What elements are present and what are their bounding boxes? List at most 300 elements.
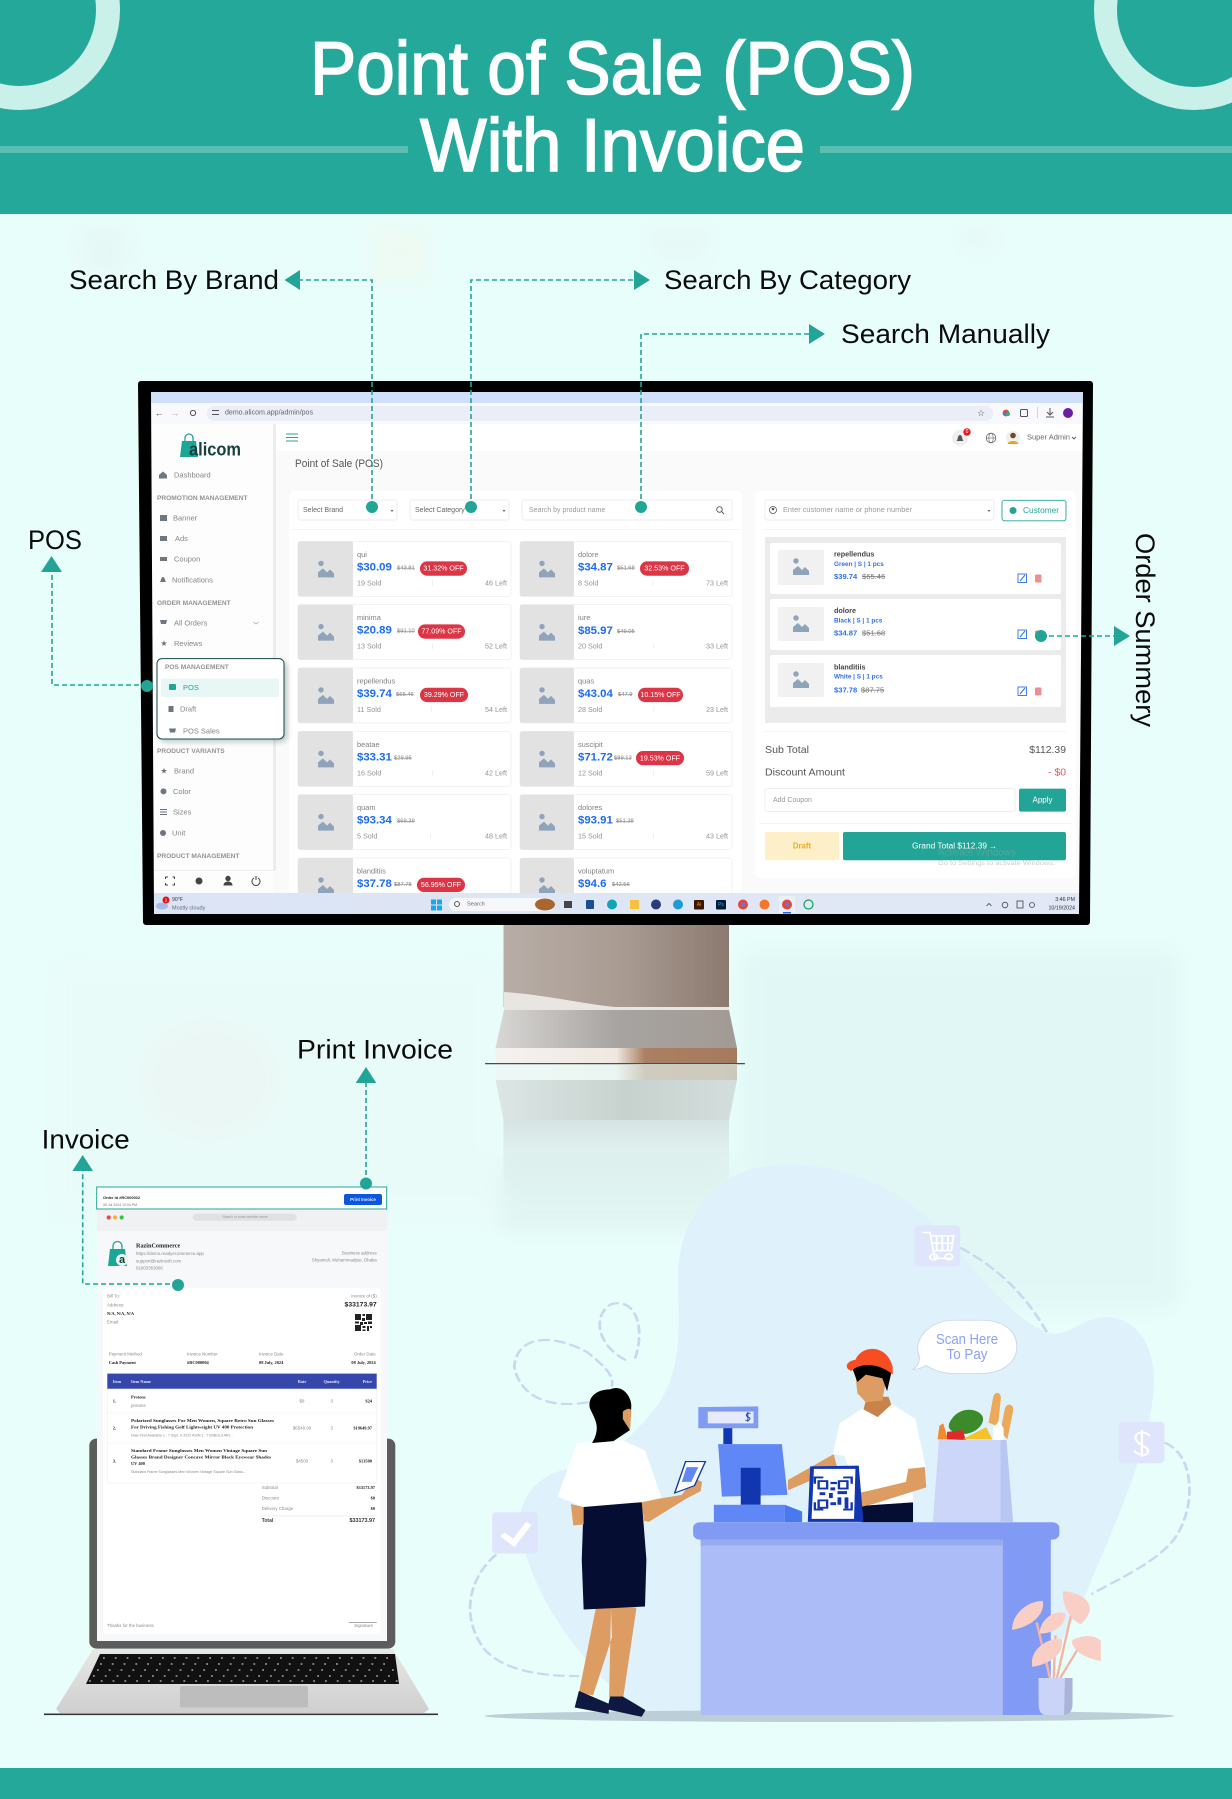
bill to: N/A, N/A, N/A [107, 1311, 135, 1316]
laptop lid [89, 1439, 395, 1649]
sidebar: PROMOTION MANAGEMENT [157, 495, 247, 502]
seller details: https://demo.readyecommerce.app [136, 1251, 204, 1256]
cashier pants [861, 1502, 913, 1522]
product card: minima: minima [357, 613, 382, 622]
sidebar footer icons [166, 876, 260, 885]
product card: suscipit: suscipit [578, 740, 603, 749]
cart item: repellendus: $39.74 [834, 572, 858, 581]
product card: quas: 10.15% OFF [640, 691, 681, 699]
menu: orders: All Orders [174, 618, 208, 628]
cart item: repellendus [770, 543, 1061, 594]
header band [0, 0, 1232, 214]
top bar: Super Admin [1027, 434, 1070, 442]
product card: qui: 46 Left [485, 578, 507, 588]
invoice logo [108, 1242, 128, 1266]
product card: beatae: $29.95 [394, 756, 412, 762]
taskbar app icons: Ps [718, 902, 724, 908]
product card: quas: $47.9 [618, 692, 633, 698]
print invoice bar: Print Invoice [350, 1197, 376, 1202]
woman arms [571, 1478, 702, 1526]
cart item: dolore [770, 599, 1061, 650]
table row 2: Date First Available 1 : 7 Sept. 9 2022 ASIN 1 : 7 B0BGL0JRN... [131, 1434, 233, 1438]
invoice meta: 08 July, 2024 [351, 1360, 376, 1365]
invoice meta: Cash Payment [109, 1360, 136, 1365]
table row 2: 3 [330, 1426, 333, 1430]
laptop base [56, 1649, 429, 1713]
product card: quam: $69.39 [397, 819, 415, 825]
product card: beatae: beatae [357, 740, 380, 749]
icon: cart tile [914, 1225, 960, 1267]
invoice table: Item [113, 1379, 122, 1384]
browser toolbar: demo.alicom.app/admin/pos [225, 410, 314, 416]
brand select: Select Brand [303, 507, 343, 514]
product card: quas: 28 Sold [578, 705, 602, 714]
invoice table: Item Name [131, 1379, 151, 1384]
bill to: Bill To: [107, 1294, 120, 1298]
cashier shirt [833, 1404, 926, 1506]
cart item: blanditiis: blanditiis [834, 662, 866, 672]
table row 3: Standard Frame Sunglasses Men Women Vintage Square Sun [131, 1448, 268, 1453]
product card: qui: qui [357, 550, 367, 559]
customer button: Customer [1023, 506, 1059, 515]
callout: Search Manually: Search Manually [841, 319, 1051, 349]
weather widget [156, 896, 206, 912]
product card: quam: 48 Left [485, 832, 507, 841]
cashier head [855, 1375, 887, 1402]
logo: alicom [189, 438, 241, 460]
apply button: Apply [1032, 796, 1053, 804]
invoice meta: #RC000004 [187, 1360, 210, 1365]
product card: suscipit: 59 Left [706, 768, 728, 778]
invoice card [103, 1288, 381, 1634]
menu: orders: ★ [160, 639, 168, 648]
menu: promotions: Coupon [174, 554, 200, 564]
invoice meta: Invoice Number [187, 1352, 218, 1356]
register [698, 1406, 802, 1522]
print invoice bar [97, 1187, 387, 1209]
cart item: blanditiis [770, 655, 1061, 707]
cart item: dolore: dolore [834, 606, 856, 615]
table row 2: Polarized Sunglasses For Men Women, Square Retro Sun Glasses [131, 1418, 274, 1423]
icon: dollar tile [1119, 1422, 1165, 1463]
invoice browser page [97, 1210, 387, 1641]
seller details: 01903353066 [136, 1266, 163, 1270]
screen [150, 392, 1086, 915]
totals: - $0 [1048, 768, 1066, 778]
cart item: repellendus: Green | S | 1 pcs [834, 561, 884, 568]
product card: repellendus: $39.74 [357, 688, 393, 700]
invoice totals: Total [262, 1518, 274, 1524]
product card: dolores: 43 Left [706, 832, 728, 841]
invoice meta: Order Date [354, 1352, 376, 1356]
product card: beatae: 16 Sold [357, 768, 381, 778]
apply button [1019, 789, 1066, 812]
product card: beatae: 42 Left [485, 768, 507, 778]
invoice totals: $33173.97 [356, 1485, 376, 1490]
table row 3: $4500 [296, 1458, 309, 1464]
callout: Print Invoice: Print Invoice [297, 1035, 453, 1065]
table row 1 [113, 1394, 373, 1408]
product card: blanditiis: 56.95% OFF [421, 881, 462, 889]
cashier arm behind [788, 1454, 838, 1490]
product card: quas: $43.04 [578, 688, 614, 700]
product card: dolores: $51.38 [616, 819, 634, 825]
windows taskbar [150, 893, 1085, 914]
POS management popover: POS [183, 683, 199, 692]
woman head [589, 1388, 631, 1443]
table row 2: 2. [113, 1426, 116, 1430]
woman top [558, 1440, 662, 1507]
totals [765, 745, 1066, 778]
speech bubble [913, 1320, 1017, 1373]
cashier neck [863, 1397, 892, 1417]
table row 3: UV 400 [131, 1461, 146, 1466]
product card: dolore: $34.87 [578, 562, 613, 574]
table row 3: Glasses Brand Designer Concave Mirror Black Eyewear Shades [131, 1454, 271, 1460]
product card: dolores: $93.91 [578, 815, 614, 827]
table row 1: $8 [300, 1398, 305, 1404]
product card: voluptatum: voluptatum [578, 866, 614, 875]
seller details: Business address [342, 1250, 378, 1256]
product card: minima: 13 Sold [357, 642, 381, 651]
cashier cap [847, 1349, 893, 1375]
customer button [1002, 500, 1066, 521]
dashed path: cart [961, 1248, 1048, 1333]
product search: Search by product name [529, 507, 605, 514]
monitor [141, 384, 1090, 922]
cart item: dolore: $51.68 [862, 628, 885, 638]
product card: dolore: 8 Sold [578, 578, 598, 588]
product card: suscipit [520, 731, 732, 786]
product card: iure: $85.97 [578, 625, 613, 637]
weather widget: 1 [165, 898, 168, 902]
footer band [0, 1768, 1232, 1799]
grocery bag [933, 1393, 1013, 1522]
product card: dolores: dolores [578, 803, 603, 812]
icon: check tile [492, 1512, 538, 1554]
product card: qui: 19 Sold [357, 578, 381, 588]
product card: repellendus: 11 Sold [357, 705, 381, 714]
callout: Search By Category: Search By Category [664, 265, 912, 295]
cart item: dolore: $34.87 [834, 628, 857, 638]
page heading: Point of Sale (POS) [295, 458, 383, 470]
bill to: Address: [107, 1302, 124, 1308]
invoice amount: $33173.97 [345, 1302, 377, 1308]
woman legs [579, 1608, 636, 1697]
dashed path: loops [514, 1303, 639, 1404]
product card: voluptatum [520, 858, 732, 893]
potted plant [1012, 1591, 1101, 1715]
menu: promotions: Notifications [172, 576, 213, 584]
browser toolbar: ← [154, 408, 164, 418]
keyboard [86, 1654, 399, 1684]
product card: qui: $43.81 [397, 566, 415, 572]
callout: Search Manually [635, 319, 1051, 513]
weather widget: Mostly cloudy [172, 906, 206, 912]
table row 2: For Driving Fishing Golf Lightweight UV 400 Protection [131, 1424, 254, 1430]
browser toolbar: → [170, 408, 180, 418]
checkout illustration [470, 1164, 1189, 1722]
product card: quam [298, 795, 511, 850]
callout: Search By Brand: Search By Brand [69, 265, 279, 295]
product card: suscipit: 19.53% OFF [640, 754, 681, 762]
header right bar [820, 146, 1232, 153]
windows logo [431, 900, 442, 910]
table row 1: 3 [330, 1398, 333, 1404]
floor shadow [485, 1710, 1174, 1722]
system tray: 3:46 PM [1055, 897, 1075, 903]
product card: blanditiis [298, 858, 512, 893]
invoice logo: a [119, 1254, 126, 1266]
menu: promotions [160, 514, 213, 584]
invoice footer: Signature [354, 1623, 374, 1628]
logo [180, 434, 241, 460]
invoice totals [261, 1485, 377, 1524]
counter [693, 1522, 1059, 1715]
invoice totals: $0 [371, 1506, 376, 1511]
product card: quas [520, 668, 732, 723]
activate windows watermark [938, 846, 1055, 867]
product card: quam: $93.34 [357, 815, 393, 827]
title: With Invoice [420, 103, 805, 187]
menu: dashboard: Dashboard [174, 470, 211, 480]
coupon input [765, 789, 1015, 812]
header left bar [0, 146, 408, 153]
product card: minima [298, 605, 511, 660]
table row 3: 3. [113, 1458, 116, 1464]
POS management popover: POS Sales [183, 726, 220, 736]
product card: dolore [520, 541, 732, 596]
speech bubble text: To Pay [946, 1346, 988, 1363]
print invoice bar: 08 Jul 2024 12:04 PM [103, 1203, 137, 1207]
category select [410, 500, 509, 520]
callout: Search By Category [465, 265, 912, 513]
totals: Discount Amount [765, 768, 845, 778]
taskbar search [449, 898, 555, 911]
browser chrome [97, 1210, 387, 1231]
browser chrome: Search or enter website name [222, 1215, 268, 1219]
menu: promotions: Ads [175, 534, 188, 543]
invoice table: Rate [298, 1379, 306, 1384]
callout: Search By Brand [69, 265, 378, 513]
callout: Order Summery: Order Summery [1130, 533, 1160, 727]
sidebar: PRODUCT MANAGEMENT [157, 853, 239, 860]
product card: iure: 33 Left [706, 642, 728, 651]
monitor bezel [141, 384, 1090, 922]
cart item: repellendus: repellendus [834, 550, 874, 558]
product card: iure [520, 605, 732, 660]
blurred watermark background [50, 225, 1180, 1310]
invoice amount: Invoice of ($) [351, 1294, 377, 1298]
activate windows watermark: Activate Windows [938, 846, 1016, 858]
product card: voluptatum: $94.6 [578, 878, 607, 890]
table row 3: Standard Frame Sunglasses Men Women Vintage Square Sun Glass... [131, 1470, 246, 1474]
bill to: Email: [107, 1320, 119, 1324]
product card: blanditiis: blanditiis [357, 866, 386, 875]
product card: dolore: $51.68 [617, 566, 635, 572]
grand total button [843, 832, 1066, 860]
callout: POS [28, 525, 153, 692]
invoice meta: Payment Method [109, 1352, 142, 1356]
seller details: RazinCommerce [136, 1242, 180, 1250]
product card: iure: $49.05 [617, 629, 635, 635]
cart item: blanditiis: $87.75 [861, 686, 884, 694]
speech bubble text: Scan Here [936, 1331, 998, 1348]
product card: suscipit: $89.13 [614, 756, 632, 762]
product card: minima: 52 Left [485, 642, 507, 651]
product card: suscipit: $71.72 [578, 752, 613, 764]
callout: Order Summery [1035, 533, 1160, 727]
invoice table [107, 1374, 377, 1483]
invoice totals: Subtotal [262, 1485, 278, 1490]
product card: minima: $91.10 [397, 629, 415, 635]
product card: quas: quas [578, 676, 594, 685]
product card: suscipit: 12 Sold [578, 768, 602, 778]
menu: variants: Brand [174, 766, 194, 776]
stand reflection [496, 1065, 737, 1205]
taskbar app icons: Ai [697, 902, 701, 908]
top bar [286, 428, 1076, 446]
browser title strip [150, 392, 1085, 403]
table row 1: 1. [113, 1398, 116, 1404]
category select: Select Category [415, 507, 465, 514]
top bar: 0 [966, 429, 969, 435]
browser toolbar: ☆ [977, 408, 985, 418]
cashier arm front [849, 1467, 926, 1509]
invoice totals: $0 [371, 1496, 376, 1500]
table row 1: Protons [131, 1394, 146, 1400]
dashed path: check [470, 1555, 578, 1676]
invoice meta: 08 July, 2024 [259, 1360, 284, 1365]
product card: dolores [520, 795, 732, 850]
table row 1: protons [131, 1403, 146, 1408]
seller details [136, 1242, 378, 1270]
product card: quas: 23 Left [706, 705, 728, 714]
callout: Invoice: Invoice [42, 1125, 130, 1155]
menu: variants: ★ [160, 766, 168, 776]
product panel [289, 491, 742, 913]
seller details: Shyamoli, Muhammadpur, Dhaka [312, 1258, 377, 1262]
customer select: Enter customer name or phone number [783, 507, 913, 514]
product card: qui: 31.32% OFF [423, 565, 464, 573]
product card: blanditiis: $87.75 [394, 882, 412, 888]
product card: minima: 77.09% OFF [421, 628, 462, 636]
activate windows watermark: Go to Settings to activate Windows. [938, 860, 1055, 867]
QR board [808, 1466, 863, 1522]
invoice totals: Discount [262, 1496, 280, 1500]
invoice footer: Thanks for the business. [107, 1623, 155, 1628]
invoice meta: Invoice Date [259, 1352, 284, 1356]
sidebar: ORDER MANAGEMENT [157, 600, 231, 607]
menu: orders: Reviews [174, 639, 203, 648]
print invoice bar: Order Id #RC000002 [103, 1195, 141, 1200]
product card: iure: iure [578, 613, 590, 622]
coupon input: Add Coupon [773, 797, 812, 804]
invoice table: Price [363, 1379, 372, 1384]
phone [675, 1462, 705, 1493]
invoice amount [345, 1294, 377, 1331]
product card: voluptatum: $42.56 [612, 882, 630, 888]
table row 1: $24 [365, 1398, 373, 1404]
POS management popover [157, 659, 287, 742]
laptop shadow [44, 1714, 438, 1715]
invoice meta [109, 1352, 376, 1365]
menu: variants [160, 766, 194, 838]
product card: dolores: 15 Sold [578, 832, 602, 841]
draft button [765, 832, 839, 860]
POS management popover: Draft [180, 704, 197, 714]
menu: dashboard [159, 472, 210, 478]
product card: iure: 20 Sold [578, 642, 602, 651]
product card: repellendus: 39.29% OFF [424, 691, 465, 699]
product card: qui [298, 541, 511, 596]
decorative right ring [1106, 0, 1232, 98]
invoice table: Quantity [324, 1379, 341, 1384]
table row 3 [113, 1448, 373, 1474]
taskbar search: Search [467, 902, 485, 908]
product card: qui: $30.09 [357, 562, 392, 574]
table row 2 [113, 1418, 373, 1438]
taskbar app icons [564, 896, 813, 914]
product card: repellendus: 54 Left [485, 705, 507, 714]
invoice footer [107, 1622, 377, 1628]
product card: repellendus: $65.46 [396, 692, 414, 698]
menu: orders [160, 620, 259, 646]
product card: repellendus: repellendus [357, 676, 396, 685]
laptop [44, 1187, 438, 1715]
speech bubble text [936, 1331, 998, 1363]
callout: Print Invoice [297, 1035, 453, 1190]
table row 3: $13500 [359, 1458, 373, 1464]
cart item: blanditiis: White | S | 1 pcs [834, 674, 883, 680]
invoice totals: Delivery Charge [262, 1506, 294, 1511]
product card: repellendus [298, 668, 511, 723]
product card: quam: 5 Sold [357, 832, 377, 841]
table row 3: 3 [330, 1458, 333, 1464]
product search [522, 500, 732, 520]
seller details: support@razinsoft.com [136, 1258, 182, 1264]
woman customer [558, 1388, 705, 1717]
product card: beatae: $33.31 [357, 752, 393, 764]
menu: variants: Sizes [173, 808, 192, 816]
product card: blanditiis: $37.78 [357, 878, 392, 890]
menu: variants: Color [173, 787, 191, 796]
cart item: blanditiis: $37.78 [834, 686, 857, 694]
woman skirt [582, 1500, 646, 1610]
table row 2: $6549.99 [293, 1426, 312, 1430]
woman shoes [575, 1691, 645, 1717]
product card: beatae [298, 731, 511, 786]
menu: promotions: Banner [173, 514, 198, 522]
menu: variants: Unit [172, 828, 186, 838]
decorative left ring [0, 0, 108, 98]
product card: dolore: dolore [578, 550, 599, 559]
customer select [765, 500, 994, 520]
cashier hair [853, 1364, 891, 1391]
cart list [765, 537, 1066, 723]
browser toolbar [156, 406, 1073, 421]
totals: Sub Total [765, 745, 809, 756]
cart item: repellendus: $65.46 [862, 572, 885, 581]
system tray [986, 897, 1075, 912]
product card: minima: $20.89 [357, 625, 392, 637]
bill to [107, 1294, 135, 1324]
weather widget: 90°F [172, 897, 183, 903]
table row 2: $19649.97 [353, 1426, 373, 1430]
product card: dolore: 73 Left [706, 578, 728, 588]
cashier [788, 1349, 926, 1522]
background blob [519, 1164, 1154, 1715]
